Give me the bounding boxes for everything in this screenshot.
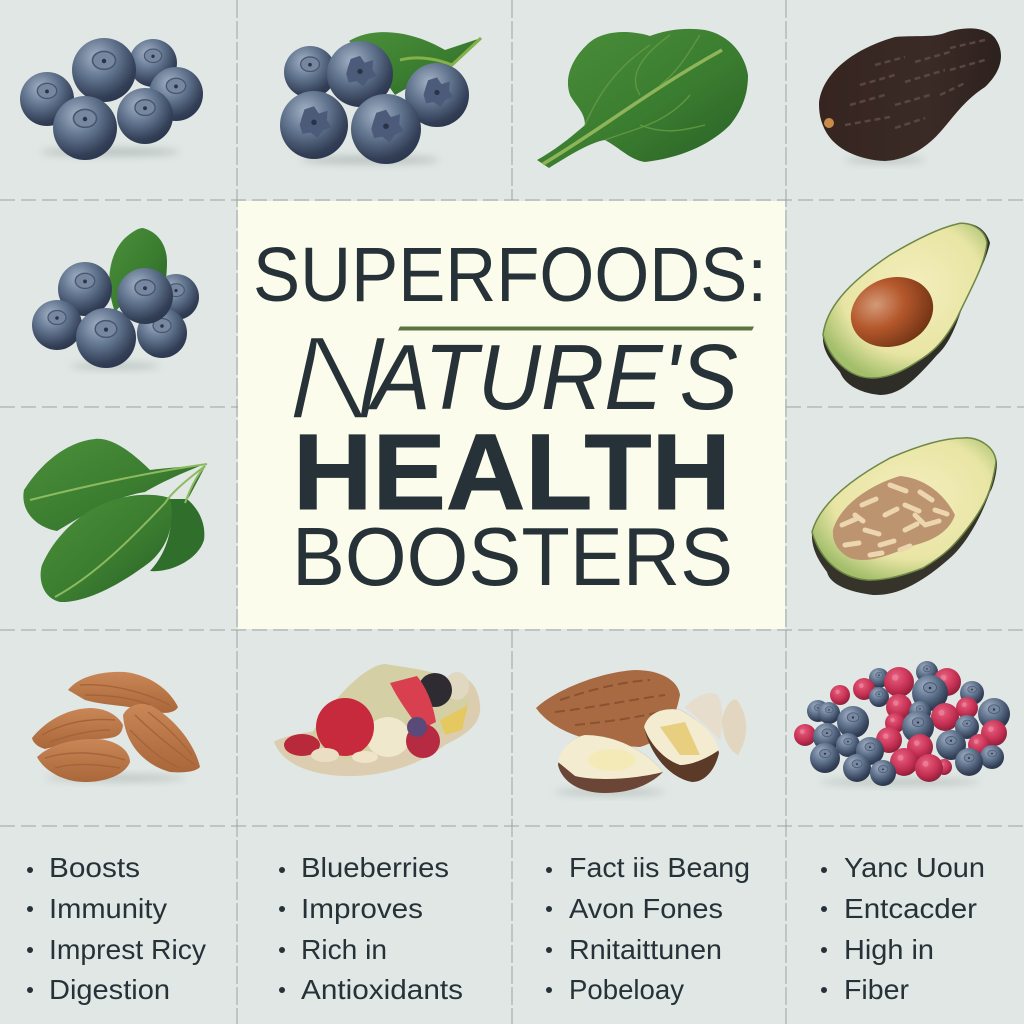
title: N bbox=[287, 311, 387, 445]
text block: column two bullets: Blueberries bbox=[301, 852, 449, 883]
text block: column three bullets: Avon Fones bbox=[569, 893, 723, 924]
centre title panel background bbox=[238, 201, 785, 629]
text block: column one bullets: Immunity bbox=[49, 893, 167, 924]
text block: column three bullets bbox=[546, 852, 750, 1005]
text block: column one bullets bbox=[27, 852, 206, 1005]
panel: blueberries with leaf bbox=[280, 32, 481, 164]
panel: dark avocado bbox=[819, 28, 1001, 163]
panel: spinach leaves bbox=[23, 439, 207, 602]
text block: column four bullets: Entcacder bbox=[844, 893, 977, 924]
text block: column one bullets: Imprest Ricy bbox=[49, 934, 206, 965]
panel: almonds bbox=[32, 672, 200, 782]
panel: mixed berries bbox=[794, 661, 1010, 786]
text block: column two bullets bbox=[279, 852, 463, 1005]
panel: fruit bowl bbox=[274, 664, 480, 776]
title: HEALTH bbox=[293, 411, 731, 532]
text block: column four bullets: High in bbox=[844, 934, 934, 965]
text block: column three bullets: Fact iis Beang bbox=[569, 852, 750, 883]
text block: column two bullets: Rich in bbox=[301, 934, 387, 965]
text block: column one bullets: Digestion bbox=[49, 974, 170, 1005]
text block: column four bullets: Yanc Uoun bbox=[844, 852, 985, 883]
panel: blueberries top left bbox=[20, 38, 203, 160]
text block: column two bullets: Improves bbox=[301, 893, 423, 924]
text block: column three bullets: Rnitaittunen bbox=[569, 934, 722, 965]
title: SUPERFOODS: bbox=[253, 232, 767, 318]
panel: avocado half with seeds bbox=[812, 438, 997, 595]
text block: column four bullets: Fiber bbox=[844, 974, 909, 1005]
panel: blueberries row two bbox=[32, 228, 199, 369]
panel: cracked nuts bbox=[536, 670, 746, 795]
text block: column four bullets bbox=[821, 852, 985, 1005]
title: ATURE'S bbox=[367, 325, 738, 429]
title: BOOSTERS bbox=[292, 510, 733, 603]
panel: avocado half with pit bbox=[823, 223, 990, 395]
text block: column three bullets: Pobeloay bbox=[569, 974, 684, 1005]
panel: spinach leaf bbox=[537, 29, 748, 168]
title bbox=[253, 232, 767, 603]
text block: column one bullets: Boosts bbox=[49, 852, 140, 883]
text block: column two bullets: Antioxidants bbox=[301, 974, 463, 1005]
